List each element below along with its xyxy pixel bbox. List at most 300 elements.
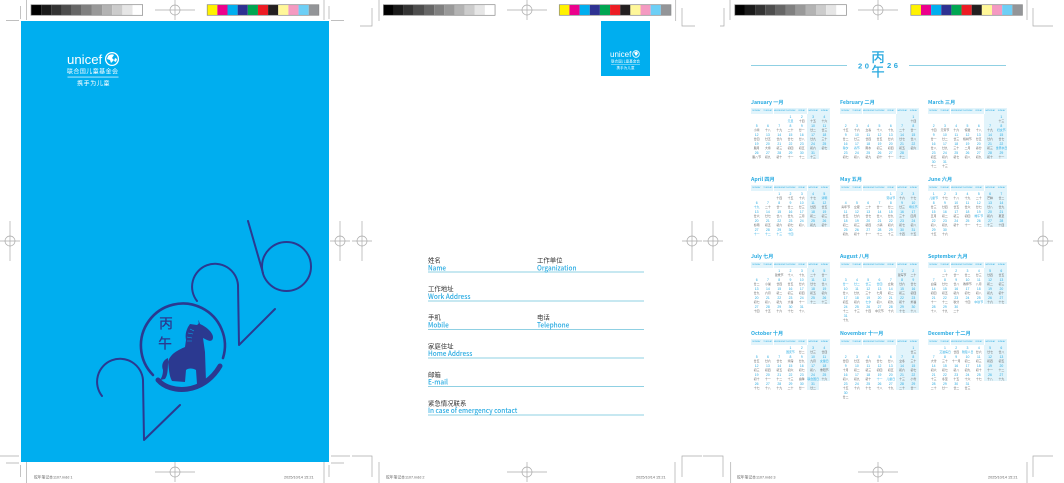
month: April: 10: [800, 201, 804, 205]
month: March: 妇女节: [997, 128, 1006, 132]
month: September: 27: [999, 296, 1003, 300]
month: May: 17: [911, 210, 915, 214]
month: February: THURSDAY: [874, 110, 885, 112]
month: October: 廿九: [799, 359, 805, 363]
month: August: 初五: [843, 300, 849, 304]
month: May: 26: [855, 228, 859, 232]
month: October: 廿二: [799, 350, 805, 354]
month: February: 13: [889, 133, 893, 137]
file slugs: 2025/10/14 15:21: [636, 476, 666, 480]
month: July: 初二: [776, 291, 782, 295]
month: November: 十三: [899, 377, 905, 381]
month: October: 联合国日: [807, 377, 819, 381]
month: February: 廿三: [854, 137, 860, 141]
month: August: 初十: [899, 300, 905, 304]
month: July: 3: [801, 269, 803, 273]
month: October: 27: [766, 382, 770, 386]
month: June: 十二: [976, 223, 982, 227]
month: December: 初六: [931, 368, 937, 372]
panel: small unicef tab: 联合国儿童基金会: [611, 58, 640, 64]
month: December: 28: [932, 382, 936, 386]
month: May: 27: [866, 228, 870, 232]
month: June: 15: [932, 210, 936, 214]
month: February: 21: [900, 142, 904, 146]
month: June: 初六: [987, 214, 993, 218]
month: April: 廿一: [776, 205, 782, 209]
month: December: 十五: [953, 377, 959, 381]
month: August: 初四: [910, 291, 916, 295]
month: December: 13: [999, 355, 1003, 359]
month: December: 初四: [987, 359, 993, 363]
month: March: SATURDAY: [985, 110, 995, 112]
month: July: 初三: [788, 291, 793, 295]
month: October: MONDAY: [752, 341, 760, 343]
month: June: SUNDAY: [998, 187, 1005, 189]
month: August: 十二: [843, 309, 849, 313]
month: December: 十六: [965, 377, 970, 381]
panel: personal information form: 姓名: [428, 256, 441, 264]
month: April: 十四: [776, 196, 782, 200]
month: May: 1: [890, 192, 892, 196]
month: July: 28: [766, 305, 770, 309]
month: June: 十五: [931, 232, 937, 236]
month: October: 29: [789, 382, 792, 386]
month: February: 27: [889, 151, 893, 155]
month: October: 25: [822, 373, 826, 377]
month: March: 18: [954, 142, 958, 146]
month: May: 立夏: [854, 205, 860, 209]
month: May: 廿五: [843, 214, 849, 218]
month: November: 13: [889, 364, 893, 368]
month: April: THURSDAY: [785, 187, 796, 189]
month: September: 3: [967, 269, 968, 273]
month: June: 25: [966, 219, 969, 223]
month: October: 30: [800, 382, 804, 386]
cover character wu: 午: [158, 334, 172, 354]
month: June: 十九: [965, 196, 970, 200]
month: February: 春节: [854, 146, 860, 150]
month: December: 22: [943, 373, 947, 377]
month: December: 十九: [998, 377, 1004, 381]
month: August: 8: [901, 278, 903, 282]
month: March: 20: [977, 142, 981, 146]
month: March: 30: [932, 160, 936, 164]
month: May: 14: [878, 210, 881, 214]
month: January: 初六: [810, 146, 816, 150]
month: April: 25: [811, 219, 815, 223]
month: March: 十八: [976, 128, 982, 132]
month: May: 23: [900, 219, 904, 223]
month: September: 中秋节: [974, 300, 983, 304]
month: December: 11: [977, 355, 981, 359]
month: February: 9: [845, 133, 847, 137]
month: February: 初四: [888, 146, 894, 150]
month: September: 22: [943, 296, 947, 300]
month: February: 22: [911, 142, 915, 146]
month: January: 28: [777, 151, 781, 155]
month: September: [928, 253, 1007, 313]
month: January: 初九: [765, 155, 771, 159]
month: June: 20: [988, 210, 992, 214]
month: May: 28: [878, 228, 881, 232]
month: June: 7: [1000, 192, 1002, 196]
month: December: 二十: [931, 386, 937, 390]
month: October: 18: [822, 364, 826, 368]
month: October: 9: [801, 355, 803, 359]
month: October: 26: [755, 382, 759, 386]
month: June: 23: [943, 219, 947, 223]
month: November: MONDAY: [841, 341, 850, 343]
month: December: 25: [977, 373, 981, 377]
month: January: 初四: [788, 146, 793, 150]
month: November: 初八: [843, 377, 849, 381]
month: April: 廿七: [765, 214, 771, 218]
month: September: 19: [988, 287, 992, 291]
month: April: 6: [756, 201, 758, 205]
month: November: 二十: [899, 386, 905, 390]
month: December: 12: [988, 355, 992, 359]
month: November: 7: [901, 355, 903, 359]
month: June: 初二: [942, 214, 948, 218]
month: May: SATURDAY: [897, 187, 907, 189]
month: May: 劳动节: [886, 196, 895, 200]
month: August: 16: [911, 287, 915, 291]
month: November: FRIDAY: [887, 341, 894, 343]
month: November: 廿一: [910, 386, 916, 390]
month: September: 初四: [931, 291, 937, 295]
month: January: 廿一: [799, 128, 805, 132]
month: September: 21: [932, 296, 936, 300]
month: February: 20: [889, 142, 893, 146]
month: February: 16: [844, 142, 848, 146]
month: March: 初九: [976, 155, 982, 159]
panel: personal information form: Name: [428, 264, 446, 274]
month: May: 7: [879, 201, 880, 205]
month: May: 十三: [888, 232, 894, 236]
month: March: 元宵节: [941, 128, 949, 132]
month: October: 九月: [810, 359, 816, 363]
month: February: 24: [855, 151, 859, 155]
month: September: 25: [977, 296, 981, 300]
month: May: 3: [912, 192, 914, 196]
month: May: TUESDAY: [852, 187, 861, 189]
month: October: 5: [756, 355, 758, 359]
month: September: 十四: [965, 300, 970, 304]
month: October: 十九: [776, 386, 782, 390]
month: January: SATURDAY: [808, 110, 818, 112]
month: September: 2: [955, 269, 957, 273]
month: January: 十三: [810, 155, 816, 159]
month: May: 廿九: [888, 214, 894, 218]
month: April: 廿三: [799, 205, 805, 209]
month: November: 19: [878, 373, 881, 377]
month: November: 27: [889, 382, 893, 386]
month: December: 30: [954, 382, 958, 386]
month: October: 6: [767, 355, 769, 359]
month: November: 20: [889, 373, 893, 377]
month: December: [928, 330, 1007, 390]
month: September: 十一: [931, 300, 937, 304]
month: July: 廿七: [810, 282, 816, 286]
month: November: THURSDAY: [874, 341, 885, 343]
month: November: 廿六: [865, 359, 871, 363]
month: March: 24: [943, 151, 947, 155]
month: February: 6: [890, 124, 892, 128]
month: November: 初三: [865, 368, 871, 372]
month: March: 廿二: [942, 137, 948, 141]
month: April: 初六: [776, 223, 782, 227]
month: January: 4: [823, 115, 825, 119]
month: September: 1: [944, 269, 946, 273]
month: November: 十六: [854, 386, 860, 390]
month: October: 二十: [788, 386, 793, 390]
month: June: FRIDAY: [975, 187, 982, 189]
month: December: 十一: [987, 368, 993, 372]
month: August: 廿二: [854, 282, 860, 286]
month: June: 二十: [976, 196, 982, 200]
month: May: 31: [911, 228, 915, 232]
month: March: 9: [933, 133, 935, 137]
panel: 2026 calendar: November 十一月: [840, 330, 883, 337]
month: August: 5: [867, 278, 869, 282]
month: February: TUESDAY: [852, 110, 861, 112]
month: May: THURSDAY: [874, 187, 885, 189]
month: September: 教师节: [963, 282, 972, 286]
month: April: [751, 176, 830, 236]
month: September: 十八: [931, 309, 937, 313]
month: July: 初四: [799, 291, 805, 295]
month: June: [928, 176, 1007, 236]
month: August: 初二: [888, 291, 894, 295]
month: January: 十四: [799, 119, 805, 123]
month: August: 9: [912, 278, 914, 282]
month: January: 22: [789, 142, 792, 146]
month: February: 28: [900, 151, 904, 155]
month: January: 14: [777, 133, 781, 137]
month: October: 17: [811, 364, 815, 368]
month: July: 十九: [799, 273, 805, 277]
month: August: 18: [855, 296, 859, 300]
month: August: 19: [866, 296, 870, 300]
month: February: 19: [878, 142, 881, 146]
month: December: 9: [955, 355, 957, 359]
month: January: 腊八节: [752, 155, 761, 159]
month: April: 廿五: [821, 205, 827, 209]
month: July: 初六: [821, 291, 827, 295]
month: February: 廿八: [910, 137, 916, 141]
month: December: 14: [932, 364, 936, 368]
month: May: 四月: [910, 214, 916, 218]
month: January: 10: [811, 124, 815, 128]
month: September: 初三: [998, 282, 1004, 286]
month: October: 初三: [754, 368, 760, 372]
month: June: 3: [955, 192, 957, 196]
month: January: 13: [766, 133, 770, 137]
month: February: [840, 99, 919, 159]
month: October: 11: [823, 355, 826, 359]
file slugs: 2025/10/14 15:21: [284, 476, 314, 480]
month: February: 23: [844, 151, 848, 155]
month: December: 廿四: [953, 350, 959, 354]
month: September: 28: [932, 305, 936, 309]
month: April: 初十: [821, 223, 827, 227]
month: February: 26: [878, 151, 881, 155]
month: February: 初九: [865, 155, 871, 159]
panel: 2026 calendar: March 三月: [928, 99, 955, 106]
file slugs: 蛇年笔记本1107.indd 2: [386, 474, 425, 480]
month: July: 小暑: [765, 282, 771, 286]
month: May: 18: [844, 219, 848, 223]
file slugs: [34, 474, 1018, 480]
month: May: 21: [878, 219, 881, 223]
month: June: 6: [989, 192, 991, 196]
month: May: 9: [901, 201, 903, 205]
month: January: 初七: [821, 146, 827, 150]
month: April: 2: [790, 192, 791, 196]
month: May: 十一: [865, 232, 871, 236]
month: March: 27: [977, 151, 981, 155]
month: April: 十五: [788, 196, 793, 200]
month: December: 16: [954, 364, 958, 368]
month: July: 初五: [810, 291, 816, 295]
month: April: 21: [766, 219, 770, 223]
month: October: 2: [801, 346, 803, 350]
month: December: 残障人日: [962, 350, 973, 354]
month: October: 廿一: [799, 386, 805, 390]
month: November: SUNDAY: [910, 341, 917, 343]
month: July: 廿九: [754, 291, 760, 295]
month: April: 20: [755, 219, 759, 223]
month: May: 16: [900, 210, 904, 214]
month: July: 建党节: [775, 273, 784, 277]
month: March: 十二: [931, 164, 937, 168]
month: March: 12: [966, 133, 969, 137]
month: November: 2: [845, 355, 847, 359]
month: October: 24: [811, 373, 815, 377]
file slugs: 蛇年笔记本1107.indd 1: [34, 474, 73, 480]
month: December: 初十: [976, 368, 982, 372]
month: June: 5: [978, 192, 980, 196]
month: July: 2: [790, 269, 791, 273]
month: October: 19: [755, 373, 759, 377]
month: March: 17: [943, 142, 947, 146]
month: June: 初四: [965, 214, 970, 218]
month: February: SATURDAY: [897, 110, 907, 112]
month: April: 13: [755, 210, 759, 214]
month: June: 4: [967, 192, 968, 196]
month: July: 23: [789, 296, 792, 300]
month: January: 大寒: [765, 146, 771, 150]
month: August: 14: [889, 287, 893, 291]
month: February: 十五: [843, 128, 849, 132]
month: May: 初三: [854, 223, 860, 227]
month: October: 10: [811, 355, 815, 359]
month: July: 22: [777, 296, 781, 300]
panel: 2026 calendar: January 一月: [751, 99, 784, 106]
month: May: 廿二: [888, 205, 894, 209]
month: May: 廿六: [854, 214, 860, 218]
month: March: 廿七: [998, 137, 1004, 141]
month: July: 7: [767, 278, 769, 282]
month: October: 初七: [799, 368, 805, 372]
month: October: 28: [777, 382, 781, 386]
month: April: TUESDAY: [763, 187, 772, 189]
month: April: 27: [755, 228, 759, 232]
month: June: 初八: [931, 223, 937, 227]
month: September: 9: [955, 278, 957, 282]
month: March: 28: [988, 151, 992, 155]
month: January: 十六: [821, 119, 827, 123]
month: October: 20: [766, 373, 770, 377]
month: September: 4: [978, 269, 980, 273]
month: January: 20: [766, 142, 770, 146]
month: June: 廿二: [998, 196, 1004, 200]
month: April: 29: [777, 228, 781, 232]
month: October: [751, 330, 830, 390]
month: September: 6: [1000, 269, 1002, 273]
month: August: 十八: [910, 309, 916, 313]
month: February: 立春: [865, 128, 871, 132]
month: May: 6: [867, 201, 869, 205]
month: April: 廿八: [776, 214, 782, 218]
month: June: 五月: [931, 214, 937, 218]
month: July: 初八: [765, 300, 771, 304]
month: January: 1: [790, 115, 791, 119]
month: July: 21: [766, 296, 770, 300]
month: June: 初三: [953, 214, 959, 218]
month: August: 24: [844, 305, 848, 309]
month: December: 24: [966, 373, 969, 377]
month: August: 初三: [899, 291, 905, 295]
month: July: 大暑: [788, 300, 793, 304]
month: November: TUESDAY: [852, 341, 861, 343]
month: June: 19: [977, 210, 981, 214]
month: August: 11: [855, 287, 859, 291]
month: September: 十二: [942, 300, 948, 304]
month: January: 初十: [776, 155, 782, 159]
month: July: 廿八: [821, 282, 827, 286]
month: August: TUESDAY: [852, 264, 861, 266]
month: August: 廿六: [899, 282, 905, 286]
month: November: 廿二: [843, 395, 849, 399]
month: June: 9: [944, 201, 946, 205]
month: January: 廿七: [788, 137, 793, 141]
month: September: 八月: [976, 282, 982, 286]
month: July: 29: [777, 305, 781, 309]
month: November: 15: [911, 364, 915, 368]
month: February: 3: [856, 124, 858, 128]
month: December: 8: [944, 355, 946, 359]
month: November: 初四: [877, 368, 882, 372]
month: August: 建军节: [898, 273, 906, 277]
month: March: 初六: [942, 155, 948, 159]
month: September: FRIDAY: [975, 264, 982, 266]
month: August: 十九: [843, 318, 849, 322]
month: November: 十月: [843, 368, 849, 372]
month: March: 16: [932, 142, 936, 146]
month: April: 9: [790, 201, 791, 205]
month: October: THURSDAY: [785, 341, 796, 343]
month: November: 9: [845, 364, 847, 368]
month: May: 24: [911, 219, 915, 223]
month: January: 25: [822, 142, 826, 146]
month: September: 14: [932, 287, 936, 291]
month: November: 十七: [865, 386, 871, 390]
month: November: 12: [878, 364, 881, 368]
month: November: 21: [900, 373, 904, 377]
month: May: 初九: [843, 232, 849, 236]
month: February: 初七: [843, 155, 849, 159]
